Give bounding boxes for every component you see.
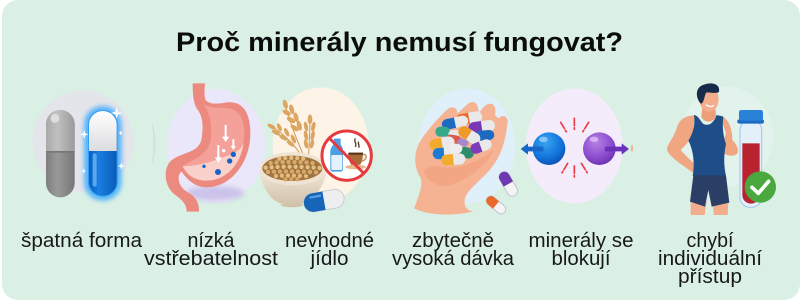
label: minerály se blokují: minerály se bbox=[528, 230, 634, 252]
coffee cup bbox=[348, 153, 363, 167]
capsules in hand bbox=[429, 110, 496, 166]
shorts bbox=[690, 175, 729, 207]
label: chybí individuální přístup: přístup bbox=[678, 266, 742, 288]
right arm and thumb up bbox=[720, 115, 738, 156]
icon: food, grain and no milk or coffee bbox=[259, 87, 371, 213]
label: nízká vstřebatelnost: vstřebatelnost bbox=[144, 248, 278, 270]
label: nevhodné jídlo bbox=[285, 230, 374, 270]
icon: hand full of capsules bbox=[414, 88, 520, 216]
neck bbox=[701, 105, 716, 122]
label: špatná forma: špatná forma bbox=[21, 230, 143, 252]
prohibition sign bbox=[322, 131, 371, 180]
loose capsules bbox=[484, 170, 520, 216]
icon: stomach bbox=[166, 83, 265, 212]
head bbox=[699, 87, 719, 112]
icon: grey and blue capsule bbox=[32, 91, 155, 201]
legs bbox=[691, 202, 728, 215]
left arm bbox=[667, 115, 707, 174]
test tube bbox=[740, 120, 762, 207]
label: nízká vstřebatelnost bbox=[144, 230, 278, 270]
icon: athlete with test tube bbox=[667, 83, 776, 215]
check badge bbox=[745, 171, 776, 203]
label: nevhodné jídlo: nevhodné bbox=[285, 230, 374, 252]
label: chybí individuální přístup bbox=[658, 230, 762, 288]
label: chybí individuální přístup: individuální bbox=[658, 248, 762, 270]
wheat bbox=[267, 99, 316, 158]
clash marks bbox=[561, 118, 589, 178]
label: nevhodné jídlo: jídlo bbox=[309, 248, 348, 270]
label: zbytečně vysoká dávka: vysoká dávka bbox=[392, 248, 515, 270]
purple arrow bbox=[605, 143, 629, 155]
label: minerály se blokují: blokují bbox=[552, 248, 611, 270]
label: zbytečně vysoká dávka: zbytečně bbox=[412, 230, 494, 252]
label: chybí individuální přístup: chybí bbox=[686, 230, 734, 252]
blue arrow bbox=[521, 143, 543, 155]
milk bottle bbox=[330, 139, 343, 172]
tank top bbox=[688, 115, 726, 176]
icon: blocking minerals bbox=[521, 89, 633, 203]
label: minerály se blokují bbox=[528, 230, 634, 270]
label: zbytečně vysoká dávka bbox=[392, 230, 515, 270]
label: nízká vstřebatelnost: nízká bbox=[188, 230, 235, 252]
capsule bbox=[302, 188, 346, 213]
title: Proč minerály nemusí fungovat? bbox=[176, 27, 623, 57]
bowl of soybeans bbox=[259, 152, 327, 207]
